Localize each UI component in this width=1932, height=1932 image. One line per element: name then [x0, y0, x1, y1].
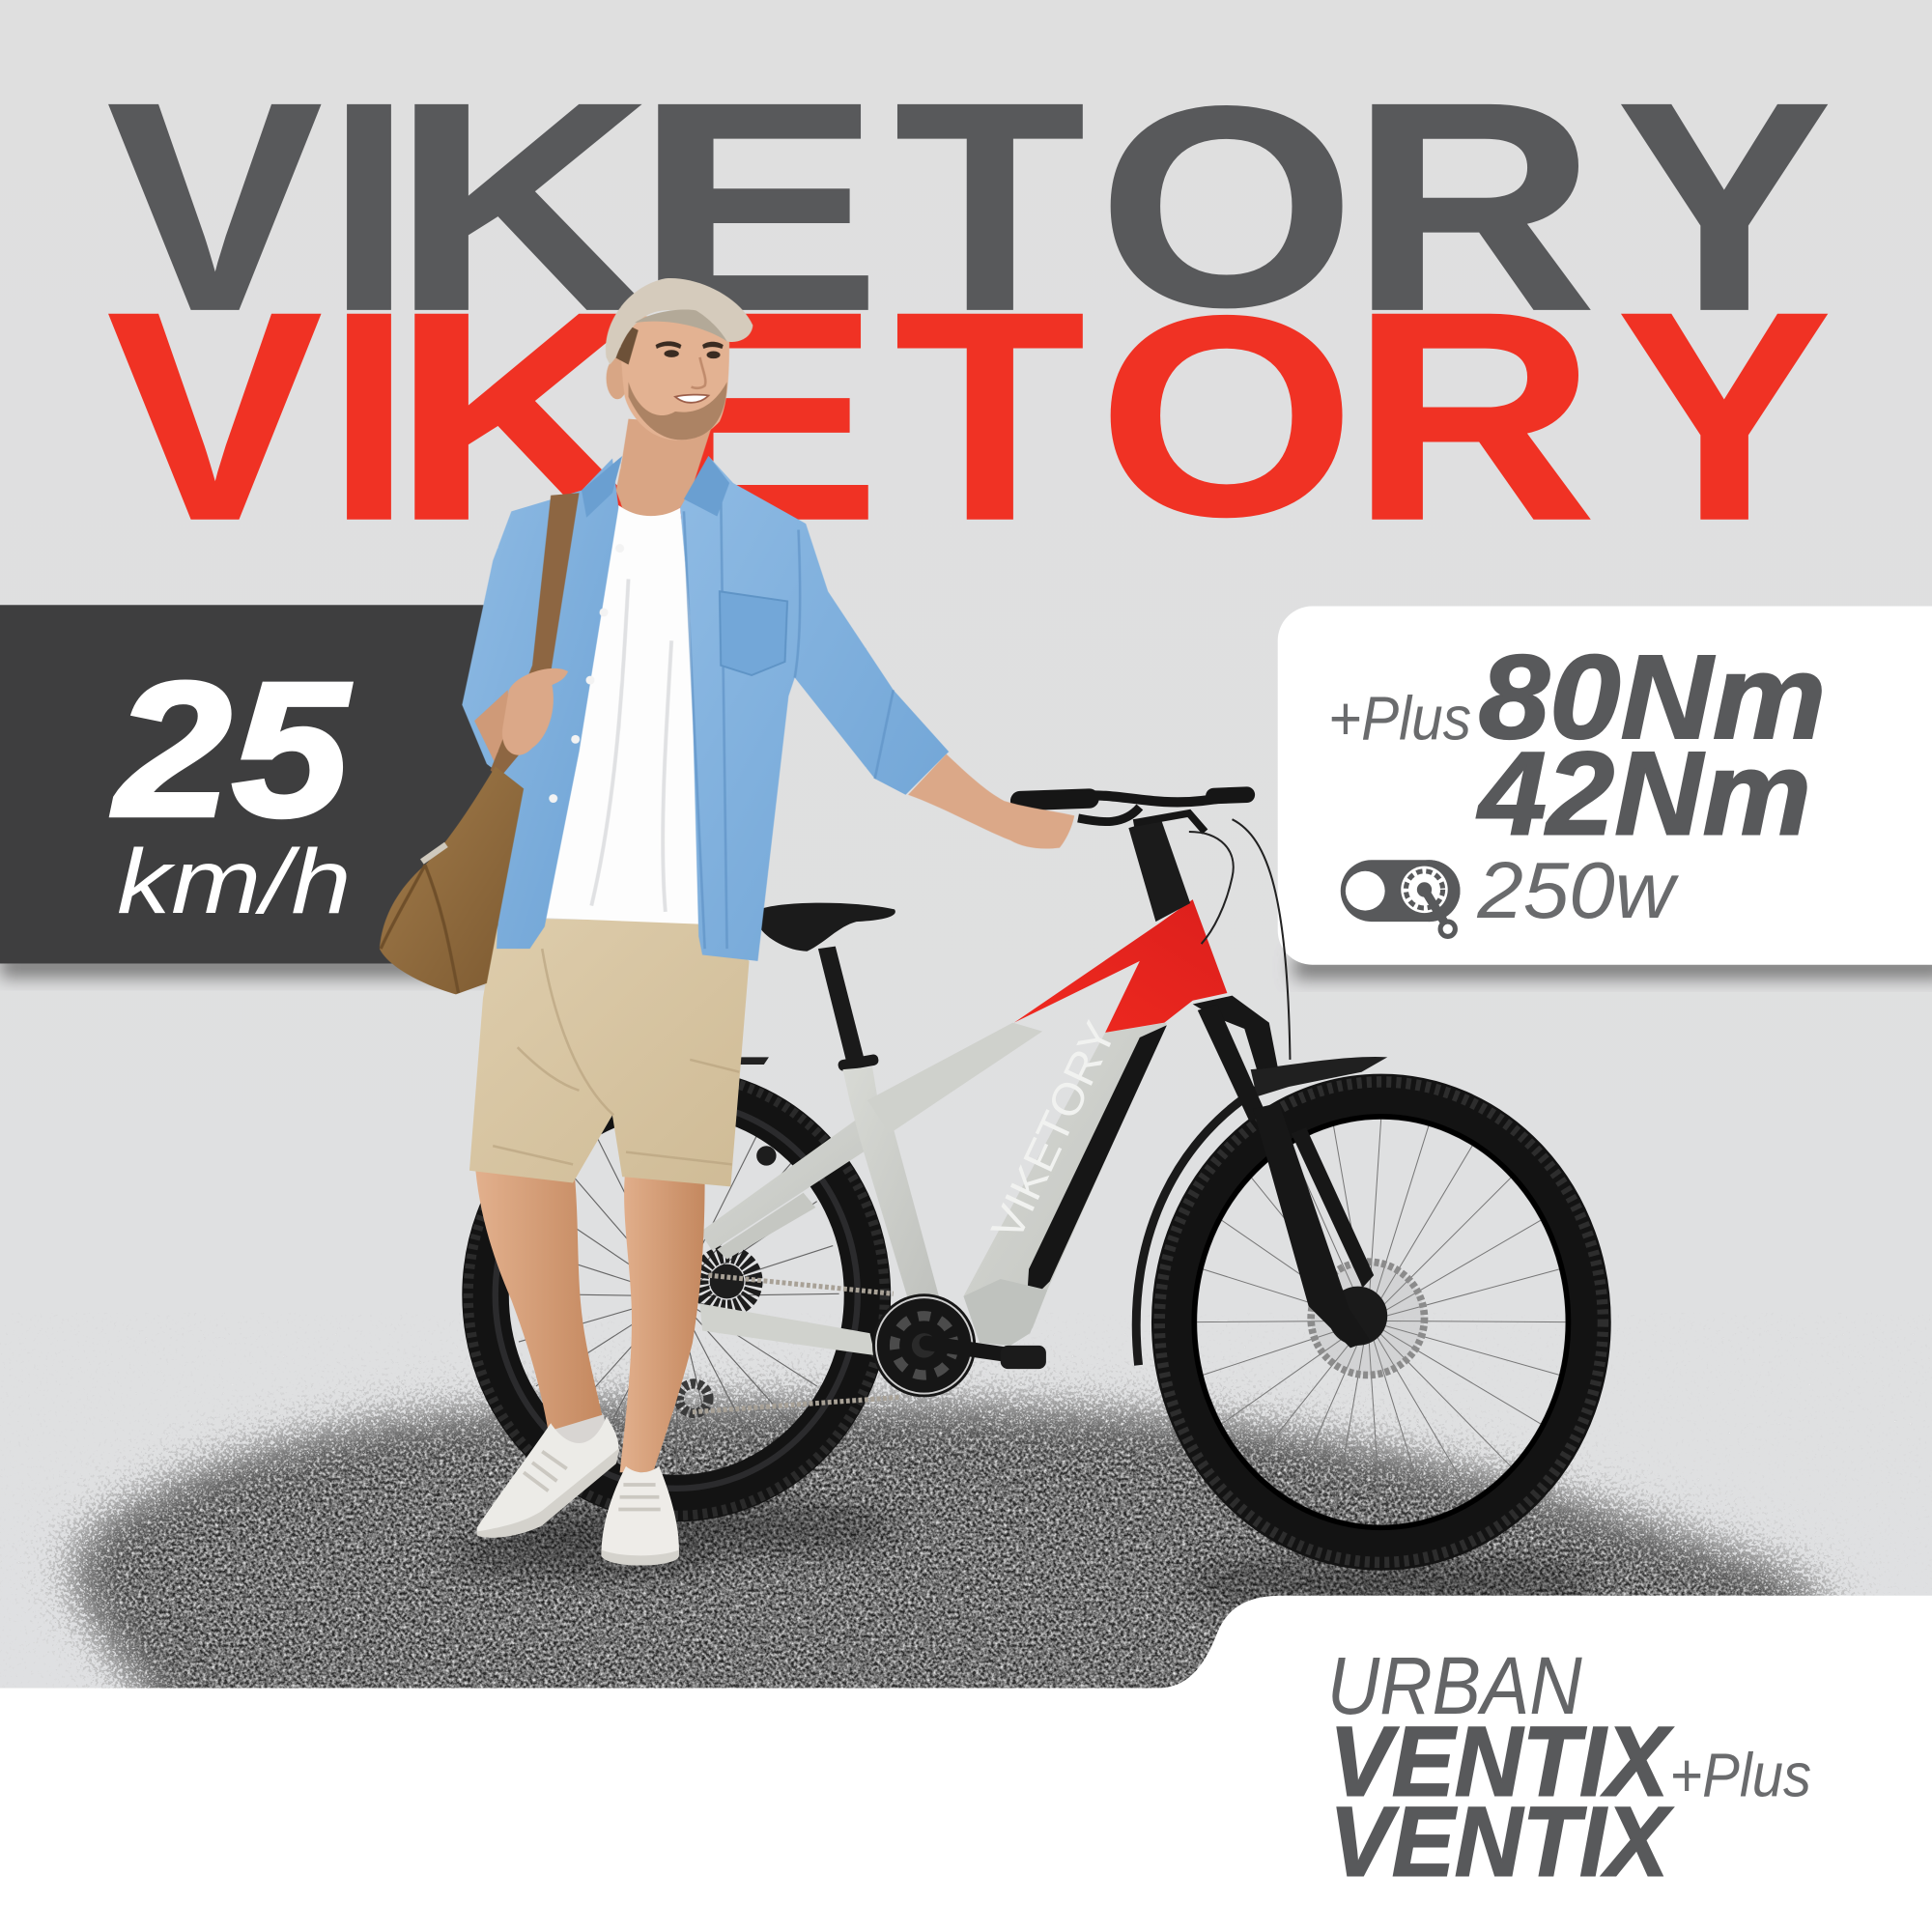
left sneaker — [477, 1417, 618, 1538]
right forearm — [908, 754, 1074, 849]
shorts — [469, 918, 750, 1186]
shorts folds — [493, 949, 739, 1164]
beard — [629, 382, 727, 440]
handlebar — [1020, 795, 1251, 832]
asphalt ground — [55, 1401, 1855, 1749]
face — [621, 314, 729, 440]
shirt shading — [684, 493, 894, 949]
rear fender tip — [734, 1057, 769, 1065]
title: red wordmark — [107, 250, 1832, 582]
shoulder strap — [491, 493, 579, 779]
power 250w: 250w — [1476, 845, 1680, 935]
title: red wordmark: R — [1350, 250, 1596, 582]
title: grey wordmark — [107, 41, 1832, 373]
saddle — [759, 903, 895, 952]
forearm left — [474, 690, 515, 766]
title: grey wordmark: Y — [1617, 41, 1832, 372]
crank — [926, 1343, 1029, 1358]
model name block — [1327, 1640, 1811, 1896]
bag buckle — [420, 842, 448, 865]
smile — [675, 395, 708, 403]
seat stay — [699, 1115, 882, 1251]
battery strip — [1028, 1025, 1167, 1293]
front fender — [1136, 1087, 1262, 1365]
front fender top — [1251, 1057, 1387, 1096]
title: grey wordmark: K — [391, 42, 652, 373]
hand on strap — [502, 668, 568, 755]
model line: urban: URBAN — [1327, 1640, 1582, 1731]
red head section — [1014, 899, 1227, 1033]
rear drivetrain — [679, 1146, 899, 1413]
torque 42Nm: 42Nm — [1476, 727, 1811, 860]
nose — [692, 357, 705, 388]
pedal — [1001, 1346, 1046, 1369]
cap — [606, 278, 753, 365]
title: red wordmark: O — [1097, 256, 1355, 575]
cap brim shadow — [635, 310, 727, 341]
right laces — [618, 1485, 661, 1509]
title: grey wordmark: V — [107, 41, 324, 372]
seat post — [818, 947, 865, 1067]
title: red wordmark: E — [635, 250, 882, 582]
shirt pocket — [720, 591, 787, 675]
title: red wordmark: T — [895, 250, 1086, 582]
right leg — [620, 1177, 705, 1472]
model line: ventix: VENTIX — [1329, 1786, 1674, 1896]
t-shirt — [546, 505, 699, 924]
left sneaker sole — [477, 1448, 620, 1538]
plus label: +Plus — [1328, 683, 1471, 753]
down tube — [963, 1023, 1167, 1346]
bottom white band — [0, 1596, 1932, 1932]
t-shirt folds — [591, 579, 671, 912]
brake disc — [1311, 1262, 1424, 1375]
title: red wordmark: I — [327, 251, 411, 582]
left sock — [554, 1414, 609, 1452]
plus suffix: +Plus — [1669, 1741, 1811, 1810]
top tube — [867, 1023, 1042, 1133]
title: grey wordmark: R — [1350, 41, 1596, 373]
panel: speed — [0, 605, 518, 963]
front wheel — [1159, 1082, 1603, 1562]
title: red wordmark: K — [391, 251, 652, 582]
title: grey wordmark: O — [1097, 46, 1355, 366]
right sneaker sole — [601, 1550, 679, 1566]
speed unit: km/h — [117, 832, 352, 933]
lower seat stay — [717, 1193, 815, 1260]
chain stay — [699, 1303, 875, 1355]
hair — [614, 327, 639, 365]
right sneaker — [601, 1466, 679, 1565]
torque 80Nm: 80Nm — [1479, 631, 1826, 764]
man — [380, 278, 1074, 1566]
ear — [607, 357, 629, 399]
bicycle — [469, 795, 1603, 1562]
shirt right panel — [680, 456, 949, 961]
title: red wordmark: Y — [1617, 250, 1832, 582]
front hub — [1328, 1287, 1387, 1346]
title: red wordmark: V — [107, 250, 324, 582]
left laces — [524, 1452, 567, 1491]
brand label on frame: VIKETORY — [981, 1014, 1125, 1247]
chainring — [872, 1293, 976, 1397]
title: grey wordmark: T — [895, 41, 1086, 372]
panel shadows — [0, 955, 1932, 979]
motor housing — [963, 1279, 1047, 1346]
neck — [616, 419, 712, 516]
bag — [380, 766, 524, 994]
title: grey wordmark: I — [327, 42, 411, 373]
speed value: 25 — [110, 642, 352, 857]
rear wheel — [469, 1074, 885, 1516]
model line: ventix plus: VENTIX — [1329, 1706, 1674, 1816]
seat tube — [842, 1067, 939, 1303]
eyes and brows — [656, 341, 724, 358]
shirt left panel — [462, 458, 618, 949]
shirt buttons — [549, 544, 624, 803]
stem — [1128, 818, 1190, 922]
bag flap fold — [381, 865, 458, 993]
icon: mid-drive motor — [1341, 860, 1460, 936]
left leg — [475, 1171, 604, 1439]
collar — [582, 456, 729, 518]
seat clamp — [838, 1054, 879, 1071]
suspension fork — [1193, 996, 1374, 1348]
brake cables — [1189, 819, 1290, 1060]
ground shadow — [443, 1511, 1602, 1601]
title: grey wordmark: E — [635, 41, 882, 373]
panel: motor specs — [1278, 607, 1932, 965]
